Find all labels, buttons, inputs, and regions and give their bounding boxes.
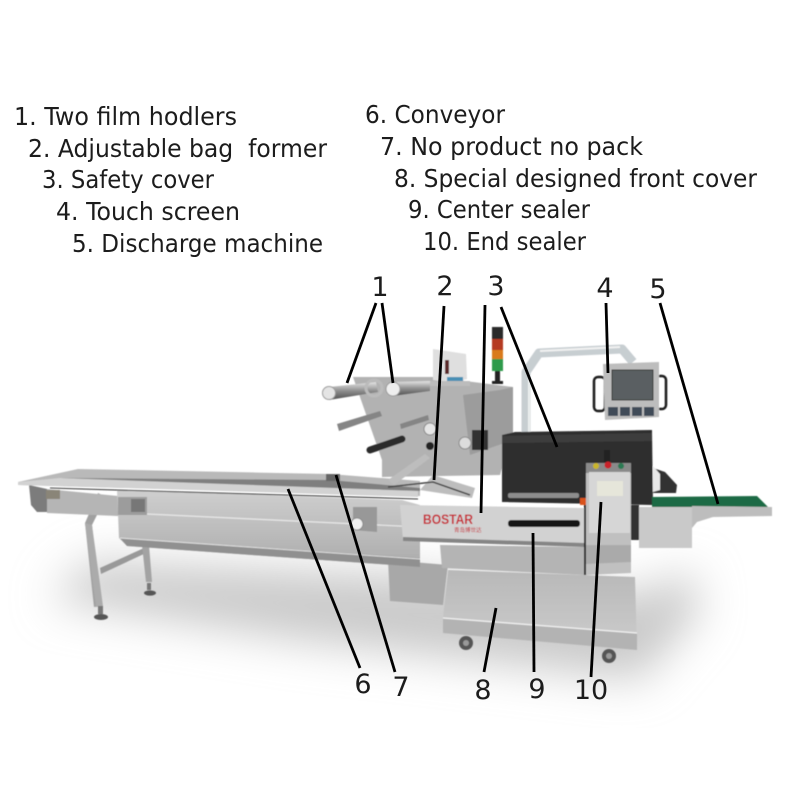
safety cover	[502, 430, 653, 505]
top bracket	[430, 349, 470, 386]
parts list: right column	[365, 100, 758, 256]
film rollers	[322, 380, 475, 498]
callout numbers: 10	[574, 675, 608, 706]
callout numbers: 7	[392, 672, 410, 703]
conveyor top rails	[18, 469, 420, 499]
rear discharge mechanism	[653, 466, 677, 493]
parts list: right column: 10. End sealer	[423, 227, 587, 256]
callout numbers: 9	[528, 674, 546, 705]
callout numbers: 1	[371, 272, 389, 303]
parts list: left column	[14, 102, 328, 258]
parts list: right column: 7. No product no pack	[380, 132, 644, 161]
back box under conveyor	[388, 560, 448, 605]
parts list: left column: 4. Touch screen	[56, 197, 240, 226]
callout lines	[288, 303, 718, 677]
parts list: left column: 5. Discharge machine	[72, 229, 323, 258]
conveyor end box	[29, 485, 118, 516]
brand logo: BOSTAR	[423, 512, 473, 527]
callout numbers: 8	[474, 675, 492, 706]
floor shadow	[50, 562, 700, 680]
parts list: right column: 8. Special designed front cover	[394, 164, 758, 193]
stack light	[492, 327, 503, 384]
callout numbers	[354, 271, 667, 706]
packing machine	[18, 327, 772, 663]
parts list: right column: 6. Conveyor	[365, 100, 506, 129]
parts list: left column: 2. Adjustable bag former	[28, 134, 328, 163]
film holder plate	[353, 377, 513, 477]
center sealer panel	[400, 505, 584, 575]
parts list: left column: 3. Safety cover	[42, 165, 215, 194]
callout numbers: 5	[649, 274, 667, 305]
touch screen	[594, 362, 666, 420]
monitor arm	[526, 347, 633, 440]
discharge conveyor	[631, 496, 772, 548]
end sealer control box	[580, 450, 631, 575]
conveyor legs	[85, 493, 156, 620]
parts list: right column: 9. Center sealer	[408, 195, 591, 224]
callout numbers: 2	[436, 271, 454, 302]
callout numbers: 4	[596, 273, 614, 304]
parts list: left column: 1. Two film hodlers	[14, 102, 237, 131]
callout numbers: 3	[487, 271, 505, 302]
brand sub-text: 青岛博世达	[454, 526, 482, 534]
base cabinet (front cover)	[443, 570, 637, 663]
conveyor side panel	[117, 490, 420, 567]
callout numbers: 6	[354, 669, 372, 700]
